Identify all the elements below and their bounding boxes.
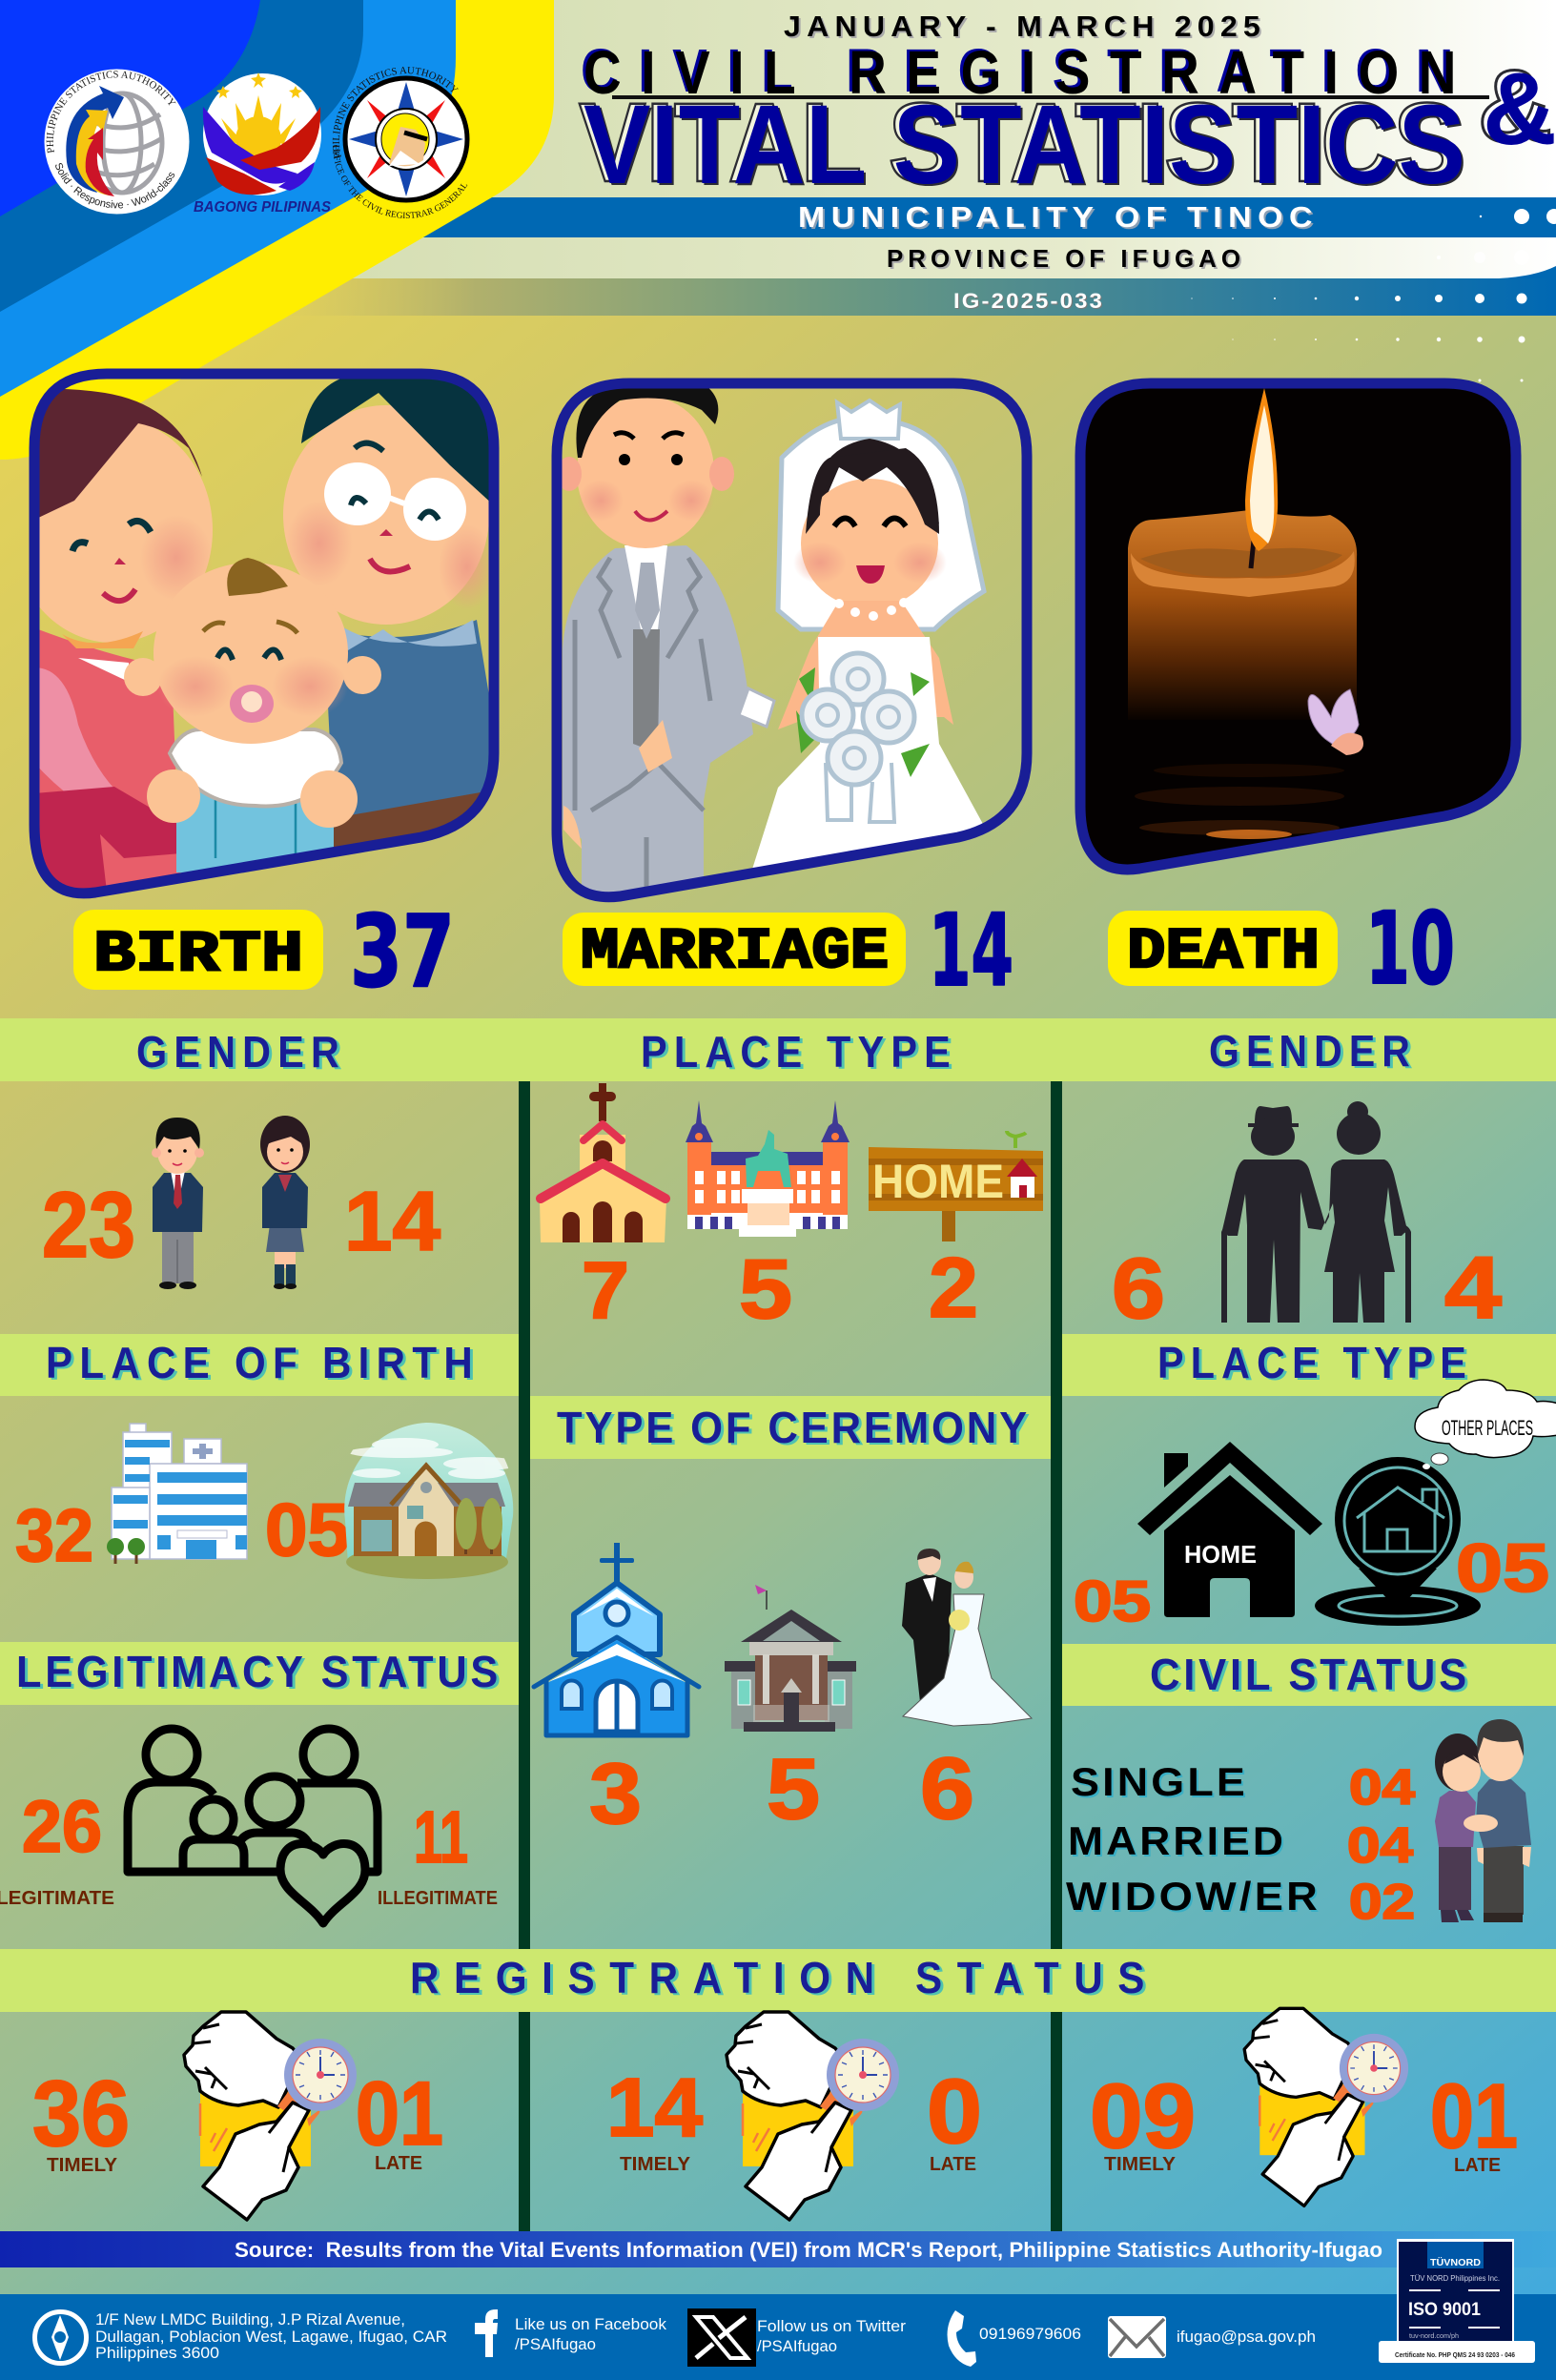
twitter text: Follow us on Twitter <box>757 2317 906 2335</box>
icon: civil hall <box>725 1585 856 1732</box>
ceremony church count: 3 <box>589 1747 642 1842</box>
icon: hospital <box>107 1424 247 1564</box>
halftone dots <box>1191 209 1556 381</box>
phone number: 09196979606 <box>979 2325 1081 2343</box>
province: PROVINCE OF IFUGAO <box>887 244 1245 273</box>
butterfly <box>1308 689 1359 746</box>
death label: DEATH <box>1127 920 1320 985</box>
facebook text: Like us on Facebook <box>515 2315 666 2333</box>
death timely caption: TIMELY <box>1104 2154 1177 2175</box>
heading: place type (marriage): PLACE TYPE <box>641 1027 957 1077</box>
facebook text: /PSAIfugao <box>515 2335 596 2353</box>
heading: place type (death): PLACE TYPE <box>1157 1338 1473 1387</box>
icon: schoolgirl <box>260 1116 310 1289</box>
civil status: single: SINGLE <box>1071 1759 1248 1804</box>
heading: place of birth: PLACE OF BIRTH <box>46 1338 480 1387</box>
death female count: 4 <box>1444 1240 1502 1337</box>
ISO certification badge: Certificate No. PHP QMS 24 93 0203 - 046 <box>1395 2352 1515 2359</box>
civil status: widow/er: WIDOW/ER <box>1066 1874 1321 1918</box>
marriage timely caption: TIMELY <box>620 2154 691 2175</box>
birth late caption: LATE <box>375 2153 422 2174</box>
death late caption: LATE <box>1454 2155 1501 2176</box>
municipality: MUNICIPALITY OF TINOC <box>798 200 1319 234</box>
ISO certification badge: tuv-nord.com/ph <box>1409 2333 1459 2340</box>
icon: compass <box>34 2311 86 2363</box>
title: & <box>1478 48 1552 163</box>
groom <box>557 385 774 906</box>
mother <box>40 389 213 889</box>
birth late count: 01 <box>356 2063 443 2165</box>
globe <box>82 93 162 193</box>
icon: location pin <box>1315 1457 1481 1626</box>
icon: wristwatch hand (marriage) <box>727 2012 899 2220</box>
marriage late count: 0 <box>927 2061 982 2163</box>
ISO certification badge: TÜV NORD Philippines Inc. <box>1410 2274 1500 2283</box>
heading: legitimacy status: LEGITIMACY STATUS <box>16 1647 502 1696</box>
source bar: Source: Results from the Vital Events Information (VEI) from MCR's Report, Philippine Statistics Authority-Ifugao <box>235 2238 1382 2262</box>
icon: wristwatch hand (birth) <box>184 2012 357 2220</box>
heading: type of ceremony: TYPE OF CEREMONY <box>557 1403 1030 1452</box>
title: & <box>1483 51 1556 166</box>
icon: bride and groom <box>902 1549 1032 1726</box>
logo: Office of the Civil Registrar General: PHILIPPINE STATISTICS AUTHORITY <box>332 67 459 158</box>
icon: black house <box>1137 1442 1322 1617</box>
home birth count: 05 <box>265 1488 350 1571</box>
birth count: 37 <box>350 893 455 1010</box>
logo caption: BAGONG PILIPINAS <box>194 199 331 215</box>
address: Dullagan, Poblacion West, Lagawe, Ifugao, CAR <box>95 2328 447 2346</box>
ISO certification badge: ISO 9001 <box>1408 2300 1481 2320</box>
illegitimate count: 11 <box>414 1796 468 1878</box>
death count: 10 <box>1365 891 1455 1007</box>
marriage place 2 count: 5 <box>739 1241 792 1336</box>
top-left swooshes <box>0 0 554 460</box>
marriage late caption: LATE <box>930 2154 976 2175</box>
logo: Office of the Civil Registrar General <box>332 67 469 218</box>
icon: house scene <box>344 1423 520 1579</box>
death label <box>1108 911 1338 986</box>
logo: Office of the Civil Registrar General: OFFICE OF THE CIVIL REGISTRAR GENERAL <box>332 145 467 218</box>
civil status: married: MARRIED <box>1068 1818 1286 1863</box>
address: Philippines 3600 <box>95 2344 219 2362</box>
icon: thought cloud <box>1415 1380 1556 1469</box>
ISO certification badge <box>1379 2239 1535 2363</box>
bride <box>744 400 984 896</box>
birth label: BIRTH <box>93 923 303 988</box>
icon: elderly couple <box>1221 1101 1411 1323</box>
birth timely count: 36 <box>32 2062 130 2165</box>
icon: older couple <box>1435 1719 1531 1922</box>
icon: X <box>687 2308 756 2367</box>
hospital count: 32 <box>15 1493 93 1577</box>
death male count: 6 <box>1112 1241 1165 1337</box>
icon: phone <box>948 2310 976 2367</box>
icon: home sign: HOME <box>872 1155 1004 1208</box>
section bands <box>0 1018 1556 2012</box>
panel: death illustration <box>1068 372 1525 887</box>
ceremony hall count: 5 <box>767 1742 820 1837</box>
marriage place 1 count: 7 <box>582 1245 629 1335</box>
logo: Bagong Pilipinas <box>194 72 331 215</box>
candle <box>1128 388 1357 839</box>
column dividers <box>519 1081 1062 2231</box>
butterfly lower wing <box>1331 733 1363 755</box>
logo: Philippine Statistics Authority <box>44 69 189 214</box>
footer <box>0 2294 1556 2380</box>
father <box>283 378 496 858</box>
icon: home sign <box>869 1131 1043 1241</box>
marriage label: MARRIAGE <box>581 920 889 985</box>
facebook text <box>515 2315 666 2353</box>
death late count: 01 <box>1430 2065 1518 2167</box>
source bar <box>0 2231 1556 2267</box>
illegitimate caption: ILLEGITIMATE <box>378 1888 498 1909</box>
icon: town hall <box>686 1100 850 1237</box>
icon: wristwatch hand (death) <box>1244 2008 1408 2206</box>
birth female count: 14 <box>344 1174 440 1268</box>
married count: 04 <box>1347 1818 1413 1874</box>
death timely count: 09 <box>1090 2065 1196 2167</box>
twitter text: /PSAIfugao <box>757 2337 837 2355</box>
title: VITAL STATISTICS <box>584 82 1465 208</box>
heading: gender (death): GENDER <box>1209 1026 1417 1076</box>
icon: family with heart <box>128 1729 378 1923</box>
heading: registration status: REGISTRATION STATUS <box>410 1953 1159 2002</box>
title: VITAL STATISTICS <box>579 80 1461 206</box>
email: ifugao@psa.gov.ph <box>1177 2328 1316 2346</box>
logo: Philippine Statistics Authority: Solid · Responsive · World-class <box>55 163 175 208</box>
logo: Philippine Statistics Authority: PHILIPPINE STATISTICS AUTHORITY <box>46 71 176 154</box>
title: VITAL STATISTICS <box>585 84 1467 210</box>
panel: marriage illustration <box>557 383 1027 906</box>
other places death count: 05 <box>1456 1531 1549 1607</box>
heading: gender (birth): GENDER <box>136 1027 346 1077</box>
marriage place 3 count: 2 <box>929 1240 978 1335</box>
address: 1/F New LMDC Building, J.P Rizal Avenue, <box>95 2310 405 2329</box>
period heading: JANUARY - MARCH 2025 <box>784 10 1266 43</box>
marriage timely count: 14 <box>606 2062 703 2154</box>
icon: facebook <box>475 2309 498 2357</box>
document number: IG-2025-033 <box>953 289 1104 313</box>
birth timely caption: TIMELY <box>47 2155 118 2176</box>
address <box>95 2310 447 2362</box>
icon: black house: HOME <box>1184 1540 1257 1569</box>
birth label <box>73 910 323 990</box>
icon: parish church <box>540 1083 666 1242</box>
widow/er count: 02 <box>1349 1875 1415 1930</box>
single count: 04 <box>1349 1760 1415 1816</box>
icon: mail <box>1108 2316 1166 2358</box>
ISO certification badge: TÜVNORD <box>1430 2256 1481 2268</box>
panel: birth illustration <box>12 374 496 906</box>
heading: civil status: CIVIL STATUS <box>1150 1650 1470 1699</box>
marriage count: 14 <box>929 892 1013 1009</box>
ceremony wedding count: 6 <box>920 1740 974 1837</box>
twitter text <box>757 2317 906 2355</box>
legitimate count: 26 <box>22 1786 102 1868</box>
header bands <box>286 0 1556 316</box>
baby <box>124 558 381 872</box>
icon: blue church <box>534 1543 699 1736</box>
icon: schoolboy <box>152 1118 204 1289</box>
birth male count: 23 <box>42 1173 135 1277</box>
home death count: 05 <box>1074 1570 1151 1633</box>
